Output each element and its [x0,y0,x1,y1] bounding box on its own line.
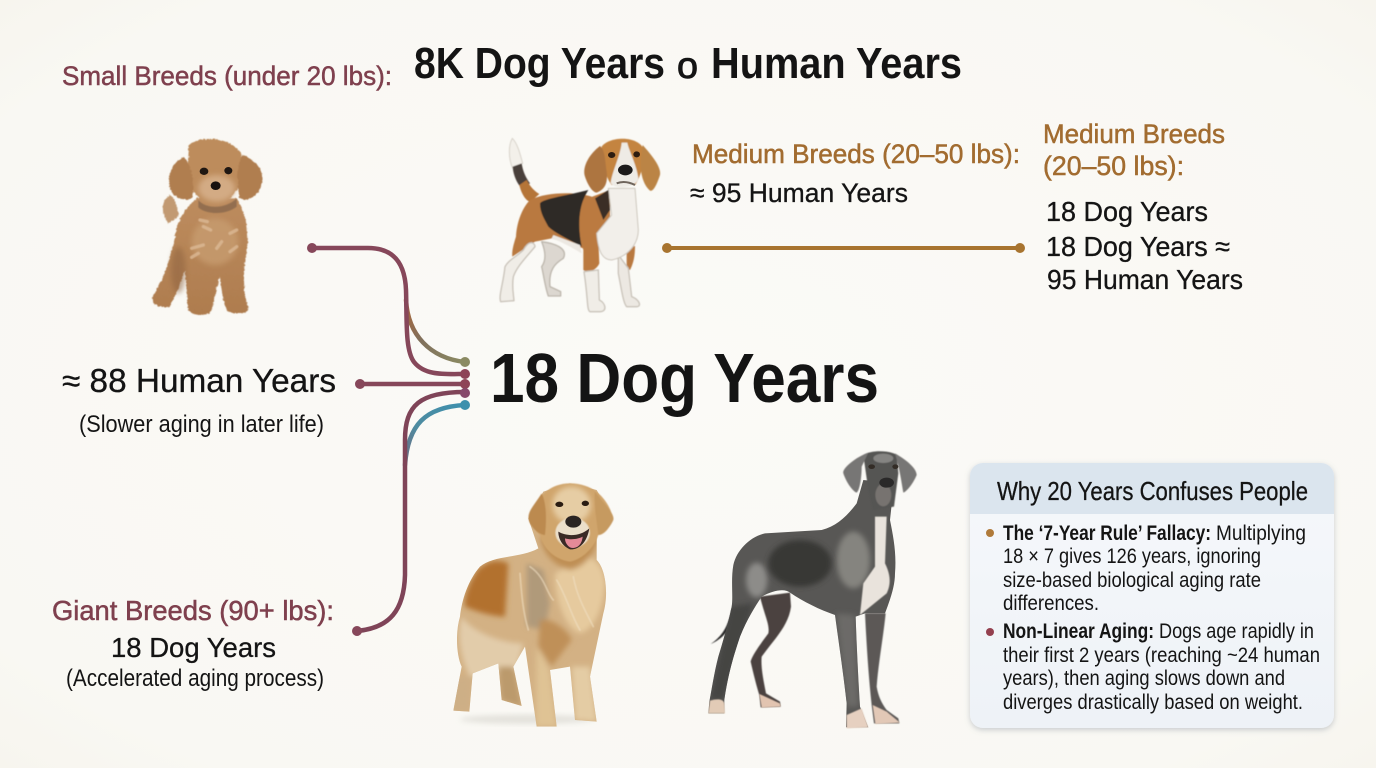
small breeds heading: Small Breeds (under 20 lbs): [62,61,392,91]
connector: medium breed line [662,243,1025,253]
medium breeds side values: 95 Human Years [1047,264,1243,295]
bullet: non-linear aging: diverges drastically based on weight. [1003,691,1303,714]
bullet: non-linear aging [986,620,1320,714]
bullet: non-linear aging: years), then aging slows down and [1003,667,1285,690]
panel header [970,463,1334,514]
medium breeds side heading: Medium Breeds [1043,119,1225,149]
title [414,39,962,88]
medium breeds side heading [1043,119,1225,181]
bullet: 7-year rule fallacy: The ‘7-Year Rule’ Fallacy: [1003,522,1211,545]
icon: small poodle [152,139,263,315]
bullet: non-linear aging: Non-Linear Aging: [1003,620,1154,643]
panel header: Why 20 Years Confuses People [997,476,1308,506]
giant breeds value: 18 Dog Years [111,632,276,663]
title: 8K Dog Years [414,39,665,88]
icon: great dane [703,451,917,733]
medium breeds side values: 18 Dog Years ≈ [1046,231,1230,262]
giant breeds note: (Accelerated aging process) [66,665,324,692]
bullet: 7-year rule fallacy: size-based biological aging rate [1003,569,1261,592]
bullet: non-linear aging: their first 2 years (reaching ~24 human [1003,644,1320,667]
title: Human Years [711,39,962,88]
medium breeds side values [1046,196,1243,295]
medium breeds side heading: (20–50 lbs): [1043,151,1184,181]
small breed note: (Slower aging in later life) [79,411,324,438]
title: o [677,45,698,86]
icon: beagle [500,138,660,312]
bullet: non-linear aging: Dogs age rapidly in [1159,620,1314,643]
medium human years value: ≈ 95 Human Years [690,178,908,208]
connectors to central label [307,243,470,636]
central heading: 18 Dog Years [490,339,879,417]
bullet: 7-year rule fallacy: differences. [1003,592,1099,615]
medium breeds label: Medium Breeds (20–50 lbs): [692,139,1020,169]
bullet: 7-year rule fallacy: 18 × 7 gives 126 years, ignoring [1003,545,1261,568]
bullet: 7-year rule fallacy [986,522,1306,615]
giant breeds heading: Giant Breeds (90+ lbs): [52,595,334,626]
panel: why 20 years confuses people [970,463,1334,728]
medium breeds side values: 18 Dog Years [1046,196,1208,227]
bullet: 7-year rule fallacy: Multiplying [1216,522,1306,545]
small breed human years: ≈ 88 Human Years [62,362,336,399]
icon: golden retriever [453,482,614,727]
